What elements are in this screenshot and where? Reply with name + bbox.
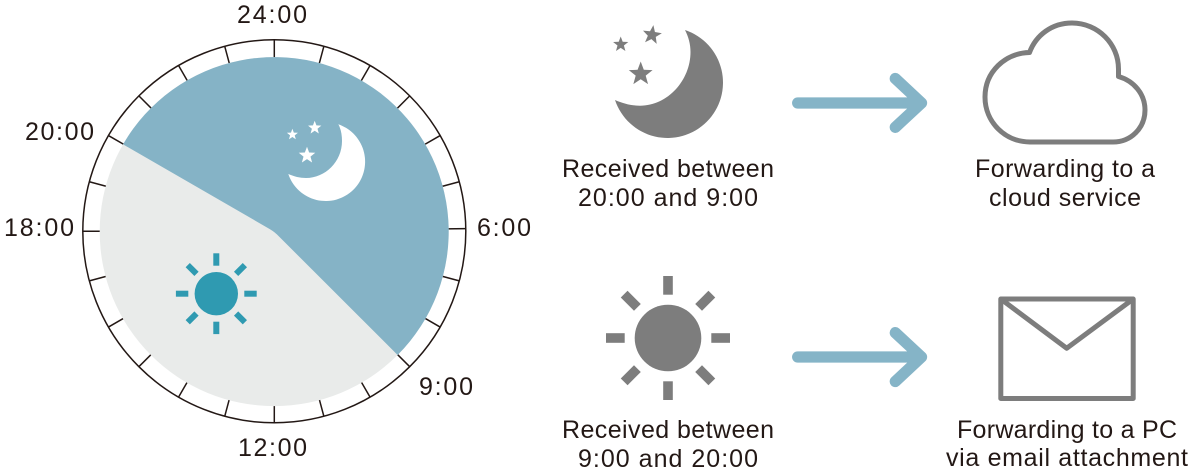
night-time sector [123, 57, 449, 355]
text: received between 20:00 and 9:00: Received between [562, 155, 774, 183]
text: forwarding to a cloud service [975, 155, 1155, 212]
text: received between 20:00 and 9:00 [562, 155, 774, 212]
arrow: day to PC [798, 333, 922, 382]
label: 12:00: 12:00 [238, 434, 307, 462]
icon: teal sun [176, 253, 257, 334]
label: 24:00: 24:00 [237, 1, 307, 29]
arrow: night to cloud [798, 78, 922, 127]
panel: night row [562, 23, 1155, 212]
text: received between 9:00 and 20:00: Received between [562, 416, 774, 444]
text: forwarding to a PC via email attachment: Forwarding to a PC [957, 416, 1177, 444]
icon: envelope [1001, 299, 1133, 398]
clock outer ring [83, 40, 466, 423]
icon: grey sun [606, 276, 730, 400]
label: 18:00: 18:00 [4, 214, 74, 242]
text: forwarding to a cloud service: Forwarding to a [975, 155, 1155, 183]
label: 6:00: 6:00 [477, 214, 531, 242]
text: received between 9:00 and 20:00 [562, 416, 774, 472]
panel: 24-hour clock [4, 1, 531, 462]
clock ticks [83, 40, 466, 423]
text: forwarding to a cloud service: cloud service [989, 184, 1141, 212]
label: 9:00: 9:00 [419, 373, 473, 401]
text: forwarding to a PC via email attachment [946, 416, 1188, 472]
icon: white moon and stars [287, 121, 365, 201]
text: received between 20:00 and 9:00: 20:00 and 9:00 [578, 184, 758, 212]
panel: day row [562, 276, 1188, 472]
icon: cloud [985, 23, 1145, 142]
daytime sector [100, 57, 449, 406]
label: 20:00: 20:00 [25, 118, 94, 146]
text: forwarding to a PC via email attachment: via email attachment [946, 444, 1188, 472]
icon: grey moon and stars [613, 24, 723, 138]
